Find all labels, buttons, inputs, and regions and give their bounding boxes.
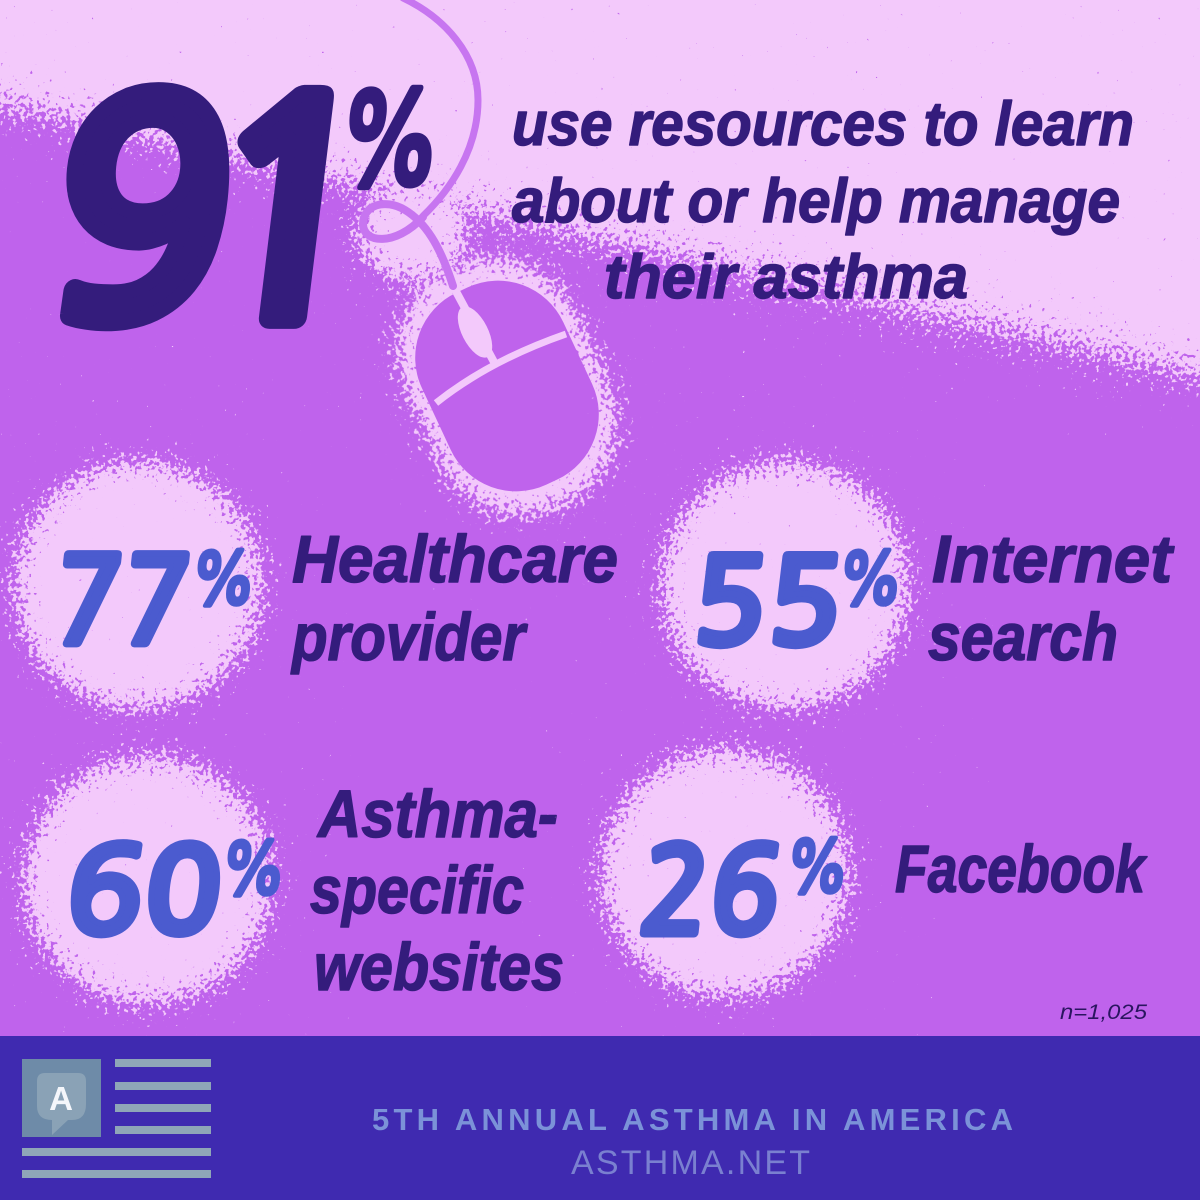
headline	[512, 90, 1134, 312]
headline: their asthma	[604, 243, 968, 312]
headline: use resources to learn	[512, 90, 1134, 159]
value 77 percent: %	[187, 545, 260, 616]
mouse icon	[354, 0, 646, 545]
label: search	[928, 600, 1118, 675]
cord halo	[354, 182, 470, 282]
mouse halo	[368, 227, 646, 545]
circle	[661, 461, 909, 709]
value 26 percent: %	[782, 833, 853, 904]
label: specific	[310, 853, 524, 928]
mouse button divider	[436, 334, 566, 403]
label	[928, 522, 1175, 675]
mouse cord stem	[452, 284, 494, 362]
mouse body	[392, 257, 622, 515]
mouse wheel	[451, 301, 499, 363]
sample size note: n=1,025	[1060, 1001, 1147, 1024]
label: websites	[314, 930, 564, 1005]
value 60 percent: 60	[60, 833, 229, 952]
footer band	[0, 1036, 1200, 1200]
stat: facebook	[601, 749, 1148, 997]
stat 91 percent	[37, 68, 449, 365]
label	[290, 522, 618, 675]
label: provider	[290, 600, 528, 675]
stat: asthma-specific websites	[24, 756, 564, 1005]
label: Asthma-	[316, 777, 558, 852]
footer title: 5TH ANNUAL ASTHMA IN AMERICA	[372, 1102, 1013, 1137]
big number 91	[37, 68, 398, 365]
logo letter A: A	[49, 1080, 73, 1117]
big number 91: 1	[179, 68, 398, 365]
circle	[14, 461, 262, 709]
footer logo flag	[22, 1059, 211, 1178]
big percent sign: %	[331, 80, 449, 205]
value 26 percent: 26	[634, 833, 787, 952]
label: Facebook	[895, 832, 1148, 907]
background: pink diagonal band	[0, 0, 1200, 411]
stat: internet search	[661, 461, 1175, 709]
value 55 percent: %	[834, 545, 907, 616]
circle	[601, 749, 849, 997]
circle	[24, 756, 272, 1004]
big number 91: 9	[37, 68, 250, 365]
logo bars	[22, 1059, 211, 1178]
label	[310, 777, 564, 1005]
value 77 percent: 77	[48, 543, 197, 662]
value 55 percent: 55	[686, 544, 849, 663]
mouse cord	[363, 0, 478, 286]
logo square	[22, 1059, 101, 1137]
label: Healthcare	[292, 522, 618, 597]
value 60 percent	[60, 833, 290, 952]
label: Internet	[932, 522, 1175, 597]
speech bubble icon	[37, 1073, 86, 1135]
headline: about or help manage	[512, 167, 1120, 236]
stat: healthcare provider	[14, 461, 618, 709]
value 60 percent: %	[217, 835, 290, 906]
footer url: ASTHMA.NET	[571, 1144, 810, 1182]
